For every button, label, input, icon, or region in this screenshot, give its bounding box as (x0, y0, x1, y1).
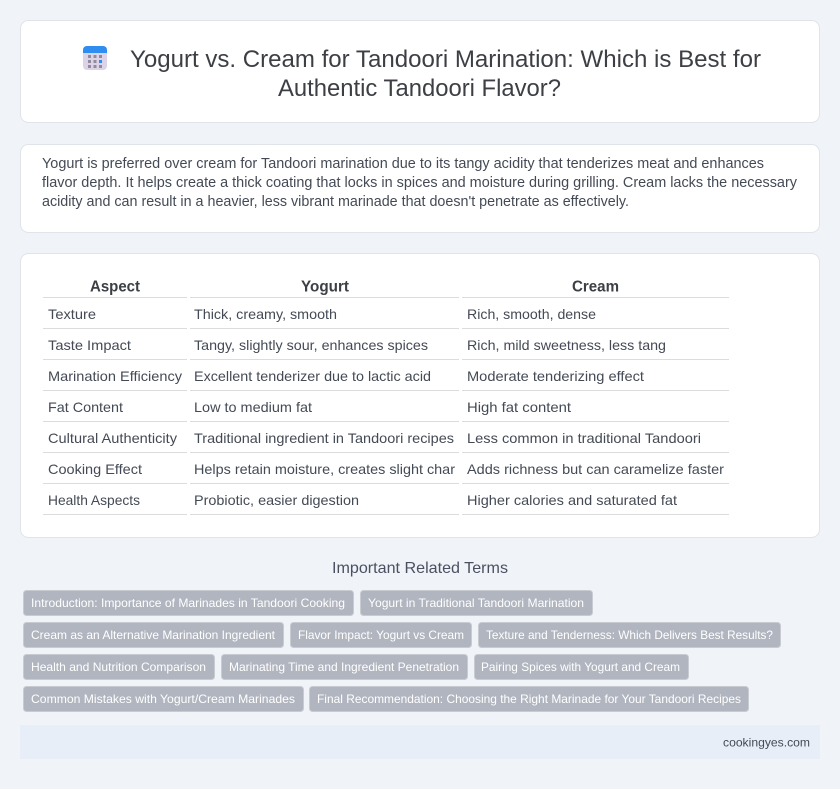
related term tags: Introduction: Importance of Marinades in Tandoori Cooking (31, 596, 345, 610)
footer (20, 725, 820, 759)
panel: header (20, 20, 820, 122)
row: fat content: High fat content (467, 399, 571, 415)
row: fat content: Fat Content (48, 399, 123, 415)
row: taste impact: Tangy, slightly sour, enhances spices (194, 337, 428, 353)
row: cooking effect: Cooking Effect (48, 461, 142, 477)
related term tags: Common Mistakes with Yogurt/Cream Marinades (31, 692, 295, 706)
row: texture: Texture (48, 306, 96, 322)
footer: cookingyes.com (723, 736, 810, 750)
related term tags: Flavor Impact: Yogurt vs Cream (298, 628, 464, 642)
related term tags: Health and Nutrition Comparison (31, 660, 206, 674)
title: Authentic Tandoori Flavor? (278, 75, 561, 102)
row: cooking effect: Helps retain moisture, creates slight char (194, 461, 455, 477)
title: Yogurt vs. Cream for Tandoori Marination: Which is Best for (130, 46, 761, 73)
panel: introduction (20, 144, 820, 232)
row: marination efficiency: Moderate tenderizing effect (467, 368, 644, 384)
table header: Yogurt (301, 278, 350, 296)
related term tags: Final Recommendation: Choosing the Right Marinade for Your Tandoori Recipes (317, 692, 741, 706)
row: fat content (48, 399, 571, 415)
related term tags: Cream as an Alternative Marination Ingredient (31, 628, 276, 642)
row: texture: Thick, creamy, smooth (194, 306, 337, 322)
row: taste impact: Rich, mild sweetness, less tang (467, 337, 666, 353)
panel: comparison table (20, 254, 820, 538)
row: cooking effect: Adds richness but can caramelize faster (467, 461, 724, 477)
text block: introduction: acidity and can result in a heavier, less vibrant marinade that doesn't penetrate as effectively. (42, 194, 629, 210)
related term tags: Yogurt in Traditional Tandoori Marination (368, 596, 584, 610)
row: health aspects: Higher calories and saturated fat (467, 492, 677, 508)
row: marination efficiency: Marination Efficiency (48, 368, 182, 384)
row: cultural authenticity (48, 430, 701, 446)
row: marination efficiency: Excellent tenderizer due to lactic acid (194, 368, 431, 384)
related term tags: Marinating Time and Ingredient Penetration (229, 660, 459, 674)
row: texture: Rich, smooth, dense (467, 306, 596, 322)
row: cultural authenticity: Traditional ingredient in Tandoori recipes (194, 430, 454, 446)
row: taste impact (48, 337, 666, 353)
heading: related terms: Important Related Terms (332, 560, 508, 577)
row: health aspects: Health Aspects (48, 492, 140, 508)
text block: introduction: Yogurt is preferred over cream for Tandoori marination due to its tangy acidity that tenderizes meat and enhances (42, 156, 764, 172)
row: fat content: Low to medium fat (194, 399, 312, 415)
table header: Aspect (90, 278, 141, 296)
row: cultural authenticity: Cultural Authenticity (48, 430, 177, 446)
row: marination efficiency (48, 368, 644, 384)
related term tags: Texture and Tenderness: Which Delivers Best Results? (486, 628, 773, 642)
row: texture (48, 306, 596, 322)
table header: Cream (572, 278, 619, 296)
related term tags (24, 590, 780, 712)
icon: calendar (83, 46, 107, 70)
text block: introduction (42, 156, 798, 210)
row: health aspects (48, 492, 677, 508)
title (130, 46, 761, 102)
row: cultural authenticity: Less common in traditional Tandoori (467, 430, 701, 446)
row: health aspects: Probiotic, easier digestion (194, 492, 359, 508)
table header (90, 278, 619, 296)
row: cooking effect (48, 461, 724, 477)
text block: introduction: flavor depth. It helps create a thick coating that locks in spices and moisture during grilling. Cream lacks the necessary (42, 175, 798, 191)
row: taste impact: Taste Impact (48, 337, 131, 353)
related term tags: Pairing Spices with Yogurt and Cream (481, 660, 680, 674)
